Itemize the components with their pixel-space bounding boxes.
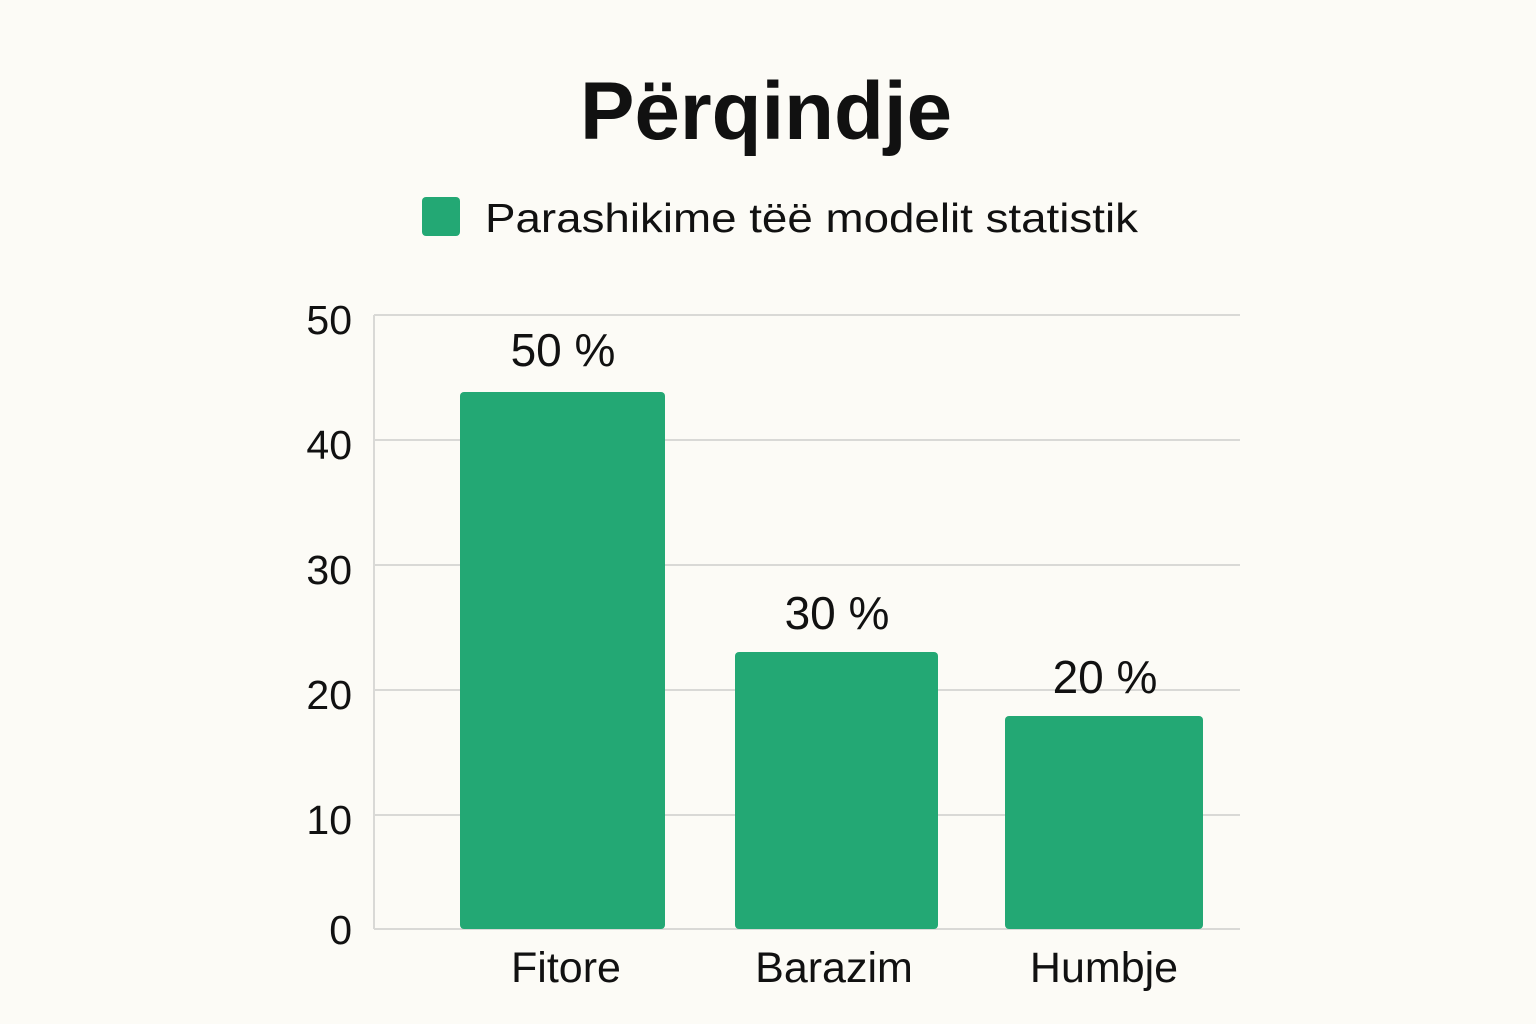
y axis labels: 30 [306, 547, 352, 593]
y axis labels: 10 [306, 797, 352, 843]
bar chart [306, 297, 1240, 992]
bar: Humbje: 20 % [1053, 651, 1157, 703]
bar: Fitore: Fitore [511, 944, 621, 992]
bar: Humbje [1005, 651, 1203, 992]
legend: Parashikime tëë modelit statistik [485, 195, 1139, 241]
bar: Humbje: Humbje [1030, 944, 1178, 992]
y axis labels [306, 297, 352, 953]
bar: Barazim: Barazim [755, 944, 913, 992]
y axis labels: 0 [329, 907, 352, 953]
y axis labels: 40 [306, 422, 352, 468]
title: Përqindje [580, 66, 952, 157]
y axis labels: 20 [306, 672, 352, 718]
y axis labels: 50 [306, 297, 352, 343]
bar: Fitore [460, 324, 665, 992]
bar: Fitore: 50 % [511, 324, 615, 376]
bar: Barazim [735, 587, 938, 992]
bar: Barazim: 30 % [785, 587, 889, 639]
